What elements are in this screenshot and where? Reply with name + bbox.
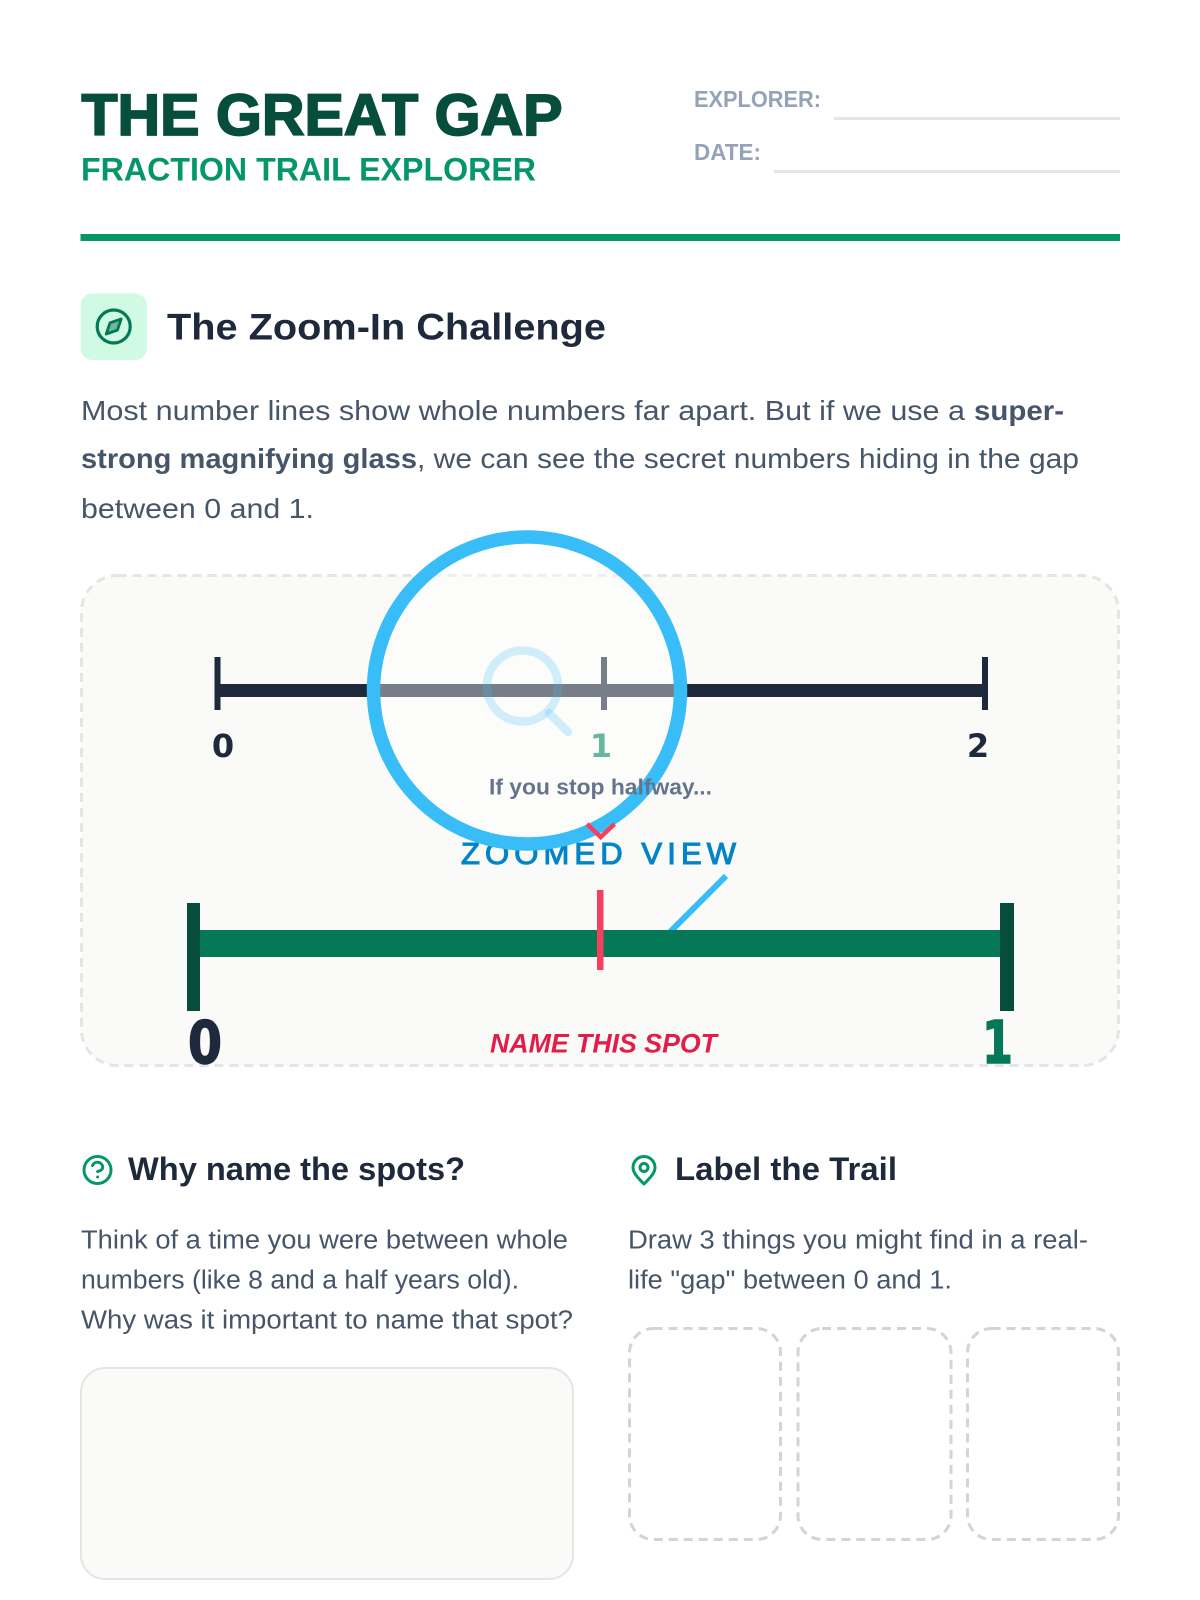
top number line 0 to 2: 2 bbox=[967, 727, 989, 765]
explorer field bbox=[694, 86, 1120, 120]
body text: Why was it important to name that spot? bbox=[81, 1306, 573, 1334]
top number line 0 to 2: 1 bbox=[590, 727, 612, 765]
zoomed number line 0 to 1 bbox=[187, 890, 1014, 1077]
intro paragraph: between 0 and 1. bbox=[81, 493, 314, 524]
body text bbox=[628, 1226, 1088, 1294]
arrow: red chevron bbox=[587, 824, 614, 837]
body text: life "gap" between 0 and 1. bbox=[628, 1266, 952, 1294]
section heading: the zoom-in challenge bbox=[80, 294, 606, 360]
body text: Think of a time you were between whole bbox=[81, 1226, 568, 1254]
panel background bbox=[82, 576, 1118, 1066]
header bbox=[81, 83, 1120, 188]
date field: DATE: bbox=[694, 139, 761, 165]
intro paragraph bbox=[81, 395, 1079, 524]
icon: map pin bbox=[633, 1156, 655, 1184]
answer box bbox=[81, 1368, 573, 1579]
icon: question bbox=[84, 1156, 111, 1184]
heading: Why name the spots? bbox=[128, 1151, 465, 1187]
halfway caption: If you stop halfway... bbox=[489, 774, 712, 800]
icon: magnifier bbox=[487, 650, 568, 732]
body text: Draw 3 things you might find in a real- bbox=[628, 1226, 1088, 1254]
top number line 0 to 2: 0 bbox=[212, 727, 234, 765]
intro paragraph: , we can see the secret numbers hiding in the gap bbox=[417, 443, 1079, 474]
explorer field: EXPLORER: bbox=[694, 86, 821, 112]
subtitle: FRACTION TRAIL EXPLORER bbox=[81, 152, 536, 188]
magnifying glass ring bbox=[374, 537, 680, 844]
intro paragraph: strong magnifying glass bbox=[81, 443, 417, 474]
panel: number line diagram bbox=[82, 537, 1118, 1077]
intro paragraph: super- bbox=[974, 395, 1064, 426]
date field bbox=[694, 139, 1120, 173]
icon: compass bbox=[80, 294, 147, 360]
name this spot label: NAME THIS SPOT bbox=[490, 1028, 719, 1058]
intro paragraph: Most number lines show whole numbers far apart. But if we use a bbox=[81, 395, 965, 426]
zoomed view label: ZOOMED VIEW bbox=[461, 836, 737, 871]
body text bbox=[81, 1226, 573, 1334]
top number line 0 to 2 bbox=[212, 657, 989, 765]
section: label the trail bbox=[628, 1151, 1118, 1540]
zoomed number line 0 to 1: 0 bbox=[188, 1008, 222, 1077]
drawing boxes bbox=[630, 1328, 1118, 1540]
connector line bbox=[667, 876, 726, 935]
section: why name the spots bbox=[81, 1151, 573, 1579]
heading: Label the Trail bbox=[675, 1151, 897, 1187]
body text: numbers (like 8 and a half years old). bbox=[81, 1266, 519, 1294]
heading: The Zoom-In Challenge bbox=[167, 306, 606, 348]
title: THE GREAT GAP bbox=[82, 83, 562, 148]
zoomed number line 0 to 1: 1 bbox=[982, 1008, 1013, 1077]
